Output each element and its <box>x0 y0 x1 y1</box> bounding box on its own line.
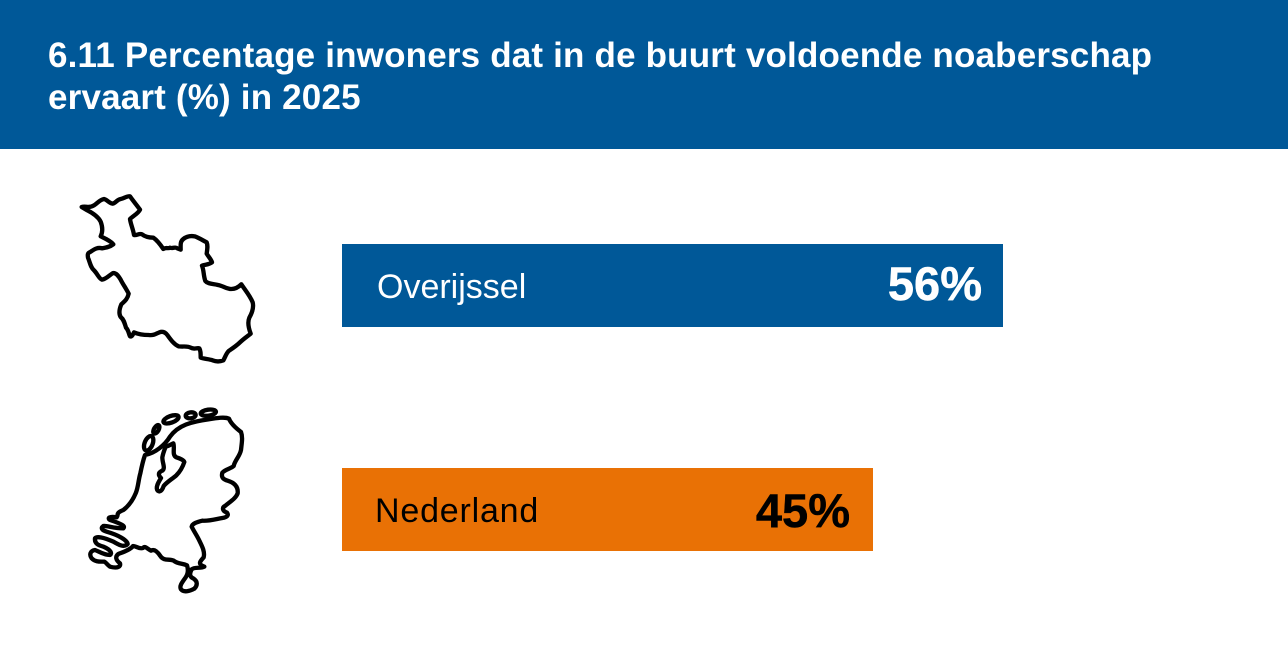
icon: map of the Netherlands <box>88 407 244 594</box>
label: Nederland: Nederland <box>375 492 539 530</box>
header banner <box>0 0 1288 149</box>
bar: Overijssel <box>342 244 1003 327</box>
label: Overijssel: Overijssel <box>377 268 526 306</box>
title: ervaart (%) in 2025 <box>48 78 361 117</box>
title: 6.11 Percentage inwoners dat in de buurt voldoende noaberschap <box>48 36 1152 75</box>
icon: map of Overijssel <box>80 194 256 364</box>
title <box>48 36 1152 117</box>
bar: Nederland <box>342 468 873 551</box>
value: 45%: 45% <box>756 484 850 537</box>
value: 56%: 56% <box>888 257 982 310</box>
